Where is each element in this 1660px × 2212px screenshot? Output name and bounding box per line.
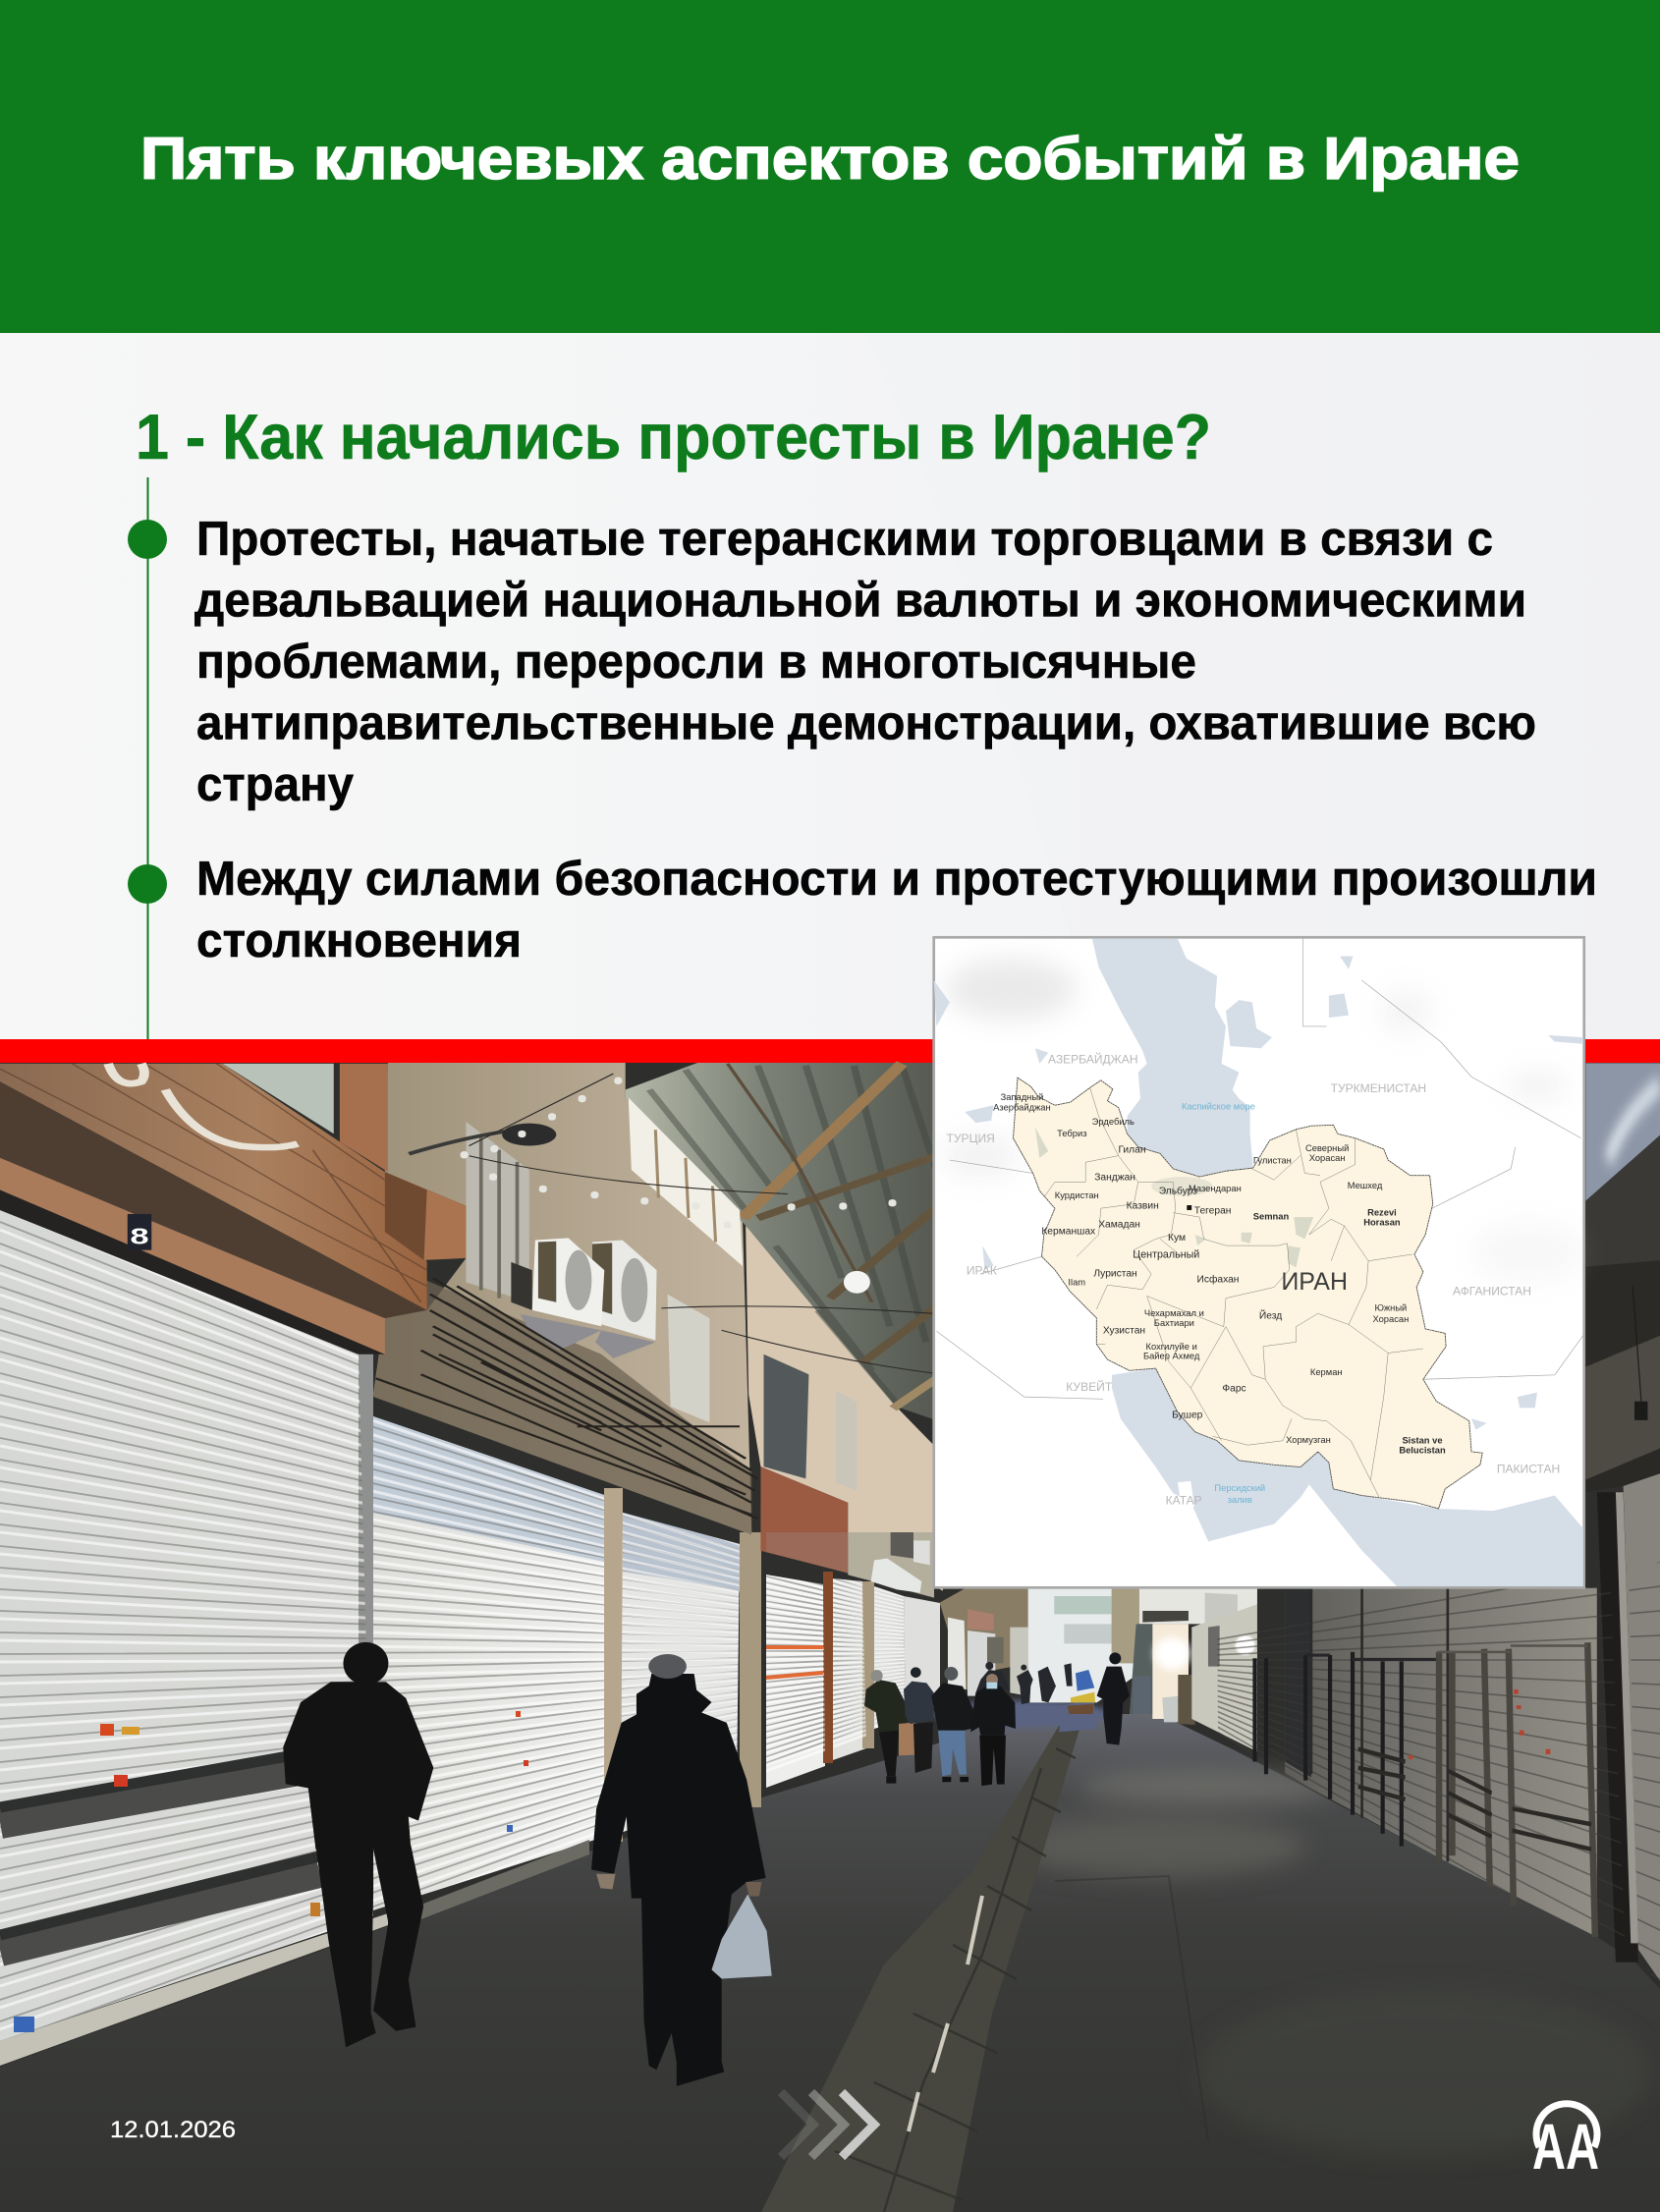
labels: provinces: Западный — [1001, 1092, 1043, 1102]
labels: countries: ТУРКМЕНИСТАН — [1331, 1081, 1426, 1095]
labels: provinces: Хамадан — [1098, 1219, 1140, 1230]
labels: provinces: Хузистан — [1103, 1325, 1145, 1336]
right shop frames — [1255, 1588, 1595, 1937]
labels: provinces: Тебриз — [1057, 1129, 1087, 1138]
roof beams — [743, 1064, 902, 1218]
labels: provinces: Ilam — [1068, 1277, 1085, 1287]
number plate — [128, 1214, 151, 1250]
cable bundle — [376, 1278, 757, 1519]
bullet one — [128, 520, 167, 559]
labels: provinces: Чехармахал и — [1144, 1308, 1204, 1318]
labels: provinces: Бушер — [1172, 1410, 1203, 1421]
air conditioners — [521, 1238, 657, 1358]
labels: provinces: Исфахан — [1196, 1274, 1239, 1286]
person 4 — [970, 1674, 1016, 1786]
labels: provinces: Horasan — [1363, 1218, 1401, 1228]
labels: provinces: Тегеран — [1194, 1206, 1231, 1217]
person 2 — [904, 1667, 934, 1773]
wood box — [385, 1172, 466, 1260]
text block: first point: страну — [196, 758, 354, 811]
title: Пять ключевых аспектов событий в Иране — [140, 126, 1520, 192]
person 3 — [931, 1667, 974, 1780]
labels: provinces: Мешхед — [1348, 1181, 1383, 1190]
labels: provinces: Курдистан — [1055, 1190, 1099, 1200]
brown box — [760, 1466, 848, 1573]
labels: provinces: Кохгилуйе и — [1146, 1342, 1197, 1352]
ornament — [108, 1064, 298, 1147]
labels: provinces: Казвин — [1127, 1201, 1159, 1212]
distant shoppers — [975, 1662, 1073, 1704]
labels: countries: ПАКИСТАН — [1497, 1462, 1560, 1475]
upper left facade and roof — [0, 1063, 943, 1591]
labels: countries — [947, 1051, 1560, 1507]
date: 12.01.2026 — [110, 2117, 236, 2143]
header band — [0, 0, 1660, 333]
labels: countries: АЗЕРБАЙДЖАН — [1048, 1051, 1138, 1066]
blackboard — [763, 1355, 808, 1478]
far end of the alley — [766, 1532, 1257, 1751]
dark soffit — [0, 1081, 427, 1318]
labels: countries: КАТАР — [1166, 1493, 1202, 1507]
labels: countries: КУВЕЙТ — [1066, 1379, 1113, 1394]
foreground figure right — [591, 1654, 772, 2086]
right strip above map level — [1585, 1063, 1660, 1492]
text block: first point: проблемами, переросли в многотысячные — [196, 636, 1196, 689]
left shutters — [0, 1210, 940, 2066]
shutter rails — [0, 1768, 319, 1950]
right shutter slats — [1217, 1562, 1660, 1980]
icon: agency logo: AA — [1532, 2110, 1599, 2183]
text block: first point: антиправительственные демонстрации, охватившие всю — [196, 697, 1536, 750]
labels: provinces: Гулистан — [1253, 1156, 1292, 1166]
text block: second point — [196, 853, 1597, 968]
cart vendor — [1068, 1670, 1095, 1714]
lakes — [934, 956, 1583, 1430]
text block: first point: Протесты, начатые тегеранскими торговцами в связи с — [196, 513, 1493, 566]
province borders — [1044, 1087, 1423, 1498]
labels: provinces: Sistan ve — [1402, 1435, 1443, 1445]
skylight windows — [629, 1098, 743, 1266]
labels: provinces: Байер Ахмед — [1143, 1352, 1200, 1361]
labels: provinces: Belucistan — [1399, 1445, 1446, 1455]
bright wall — [1152, 1624, 1189, 1719]
labels: seas: залив — [1228, 1495, 1252, 1505]
number plate: 8 — [130, 1225, 149, 1249]
orange stripes — [766, 1647, 823, 1678]
labels: provinces: Мазендаран — [1189, 1184, 1242, 1193]
wood fascia — [0, 1064, 427, 1310]
person 1 — [864, 1670, 915, 1784]
text block: second point: столкновения — [196, 914, 522, 968]
labels: provinces: Южный — [1374, 1303, 1407, 1313]
labels: provinces: Фарс — [1222, 1383, 1246, 1394]
window above fascia — [223, 1064, 334, 1134]
red divider — [0, 1039, 1660, 1063]
labels: provinces: Хорасан — [1372, 1314, 1409, 1324]
map — [934, 937, 1585, 1587]
labels: countries: ТУРЦИЯ — [947, 1132, 995, 1145]
shutter housing shadow — [0, 1189, 385, 1355]
text block: first point: девальвацией национальной валюты и экономическими — [194, 574, 1526, 627]
windows — [466, 1122, 529, 1302]
capital marker — [1187, 1205, 1191, 1210]
shutter slats — [0, 1216, 906, 2031]
caspian sea — [1092, 939, 1253, 1177]
labels: provinces: Гилан — [1118, 1144, 1146, 1155]
labels: provinces: Центральный — [1133, 1249, 1199, 1261]
section heading: 1 - Как начались протесты в Иране? — [136, 401, 1211, 472]
labels: seas: Каспийское море — [1182, 1102, 1255, 1112]
labels: provinces: Азербайджан — [993, 1103, 1051, 1113]
icon: chevrons — [781, 2092, 874, 2157]
salt flats — [1035, 1128, 1313, 1267]
labels: countries: АФГАНИСТАН — [1453, 1285, 1531, 1299]
persian gulf — [1112, 1368, 1583, 1586]
group of walking people — [864, 1652, 1130, 1786]
panel: text background — [0, 333, 1660, 1039]
text block: second point: Между силами безопасности и протестующими произошли — [196, 853, 1597, 906]
stickers — [14, 1711, 528, 2032]
labels: provinces: Эльбурз — [1159, 1185, 1197, 1196]
street lamp — [409, 1124, 556, 1154]
brick pilaster — [340, 1064, 388, 1172]
labels: provinces: Северный — [1305, 1143, 1349, 1153]
labels: seas — [1182, 1102, 1265, 1505]
photo: closed bazaar — [0, 1063, 1660, 2212]
labels: provinces — [993, 1092, 1446, 1455]
shaded lower wall — [373, 1278, 751, 1534]
labels: provinces: Эрдебиль — [1092, 1117, 1134, 1127]
labels: provinces: Луристан — [1093, 1268, 1137, 1279]
timeline — [128, 477, 167, 1039]
second wood band — [0, 1158, 385, 1355]
right side shutters — [1285, 1473, 1660, 1981]
foreground figure left — [283, 1642, 433, 2047]
labels: provinces: Хормузган — [1286, 1435, 1331, 1445]
man in black far right — [1097, 1652, 1130, 1745]
labels: provinces: Занджан — [1094, 1173, 1135, 1184]
labels: provinces: Бахтиари — [1154, 1318, 1194, 1328]
bullet two — [128, 864, 167, 904]
terrain shading — [941, 959, 1585, 1283]
labels: provinces: Керманшах — [1041, 1226, 1096, 1237]
brick wall — [746, 1226, 943, 1591]
foreground people — [283, 1642, 772, 2086]
floor — [0, 1700, 1660, 2212]
corrugated roof — [626, 1063, 943, 1422]
labels: seas: Персидский — [1214, 1483, 1265, 1493]
iran territory — [1014, 1078, 1482, 1509]
labels: provinces: Rezevi — [1367, 1208, 1397, 1218]
beige wall — [373, 1063, 751, 1534]
labels: countries: ИРАК — [967, 1264, 997, 1278]
labels: provinces: Керман — [1310, 1367, 1343, 1377]
labels: provinces: Йезд — [1259, 1309, 1282, 1322]
string lights — [465, 1074, 943, 1374]
labels: provinces: Semnan — [1253, 1211, 1289, 1221]
label: iran: ИРАН — [1281, 1268, 1348, 1296]
text block: first point — [194, 513, 1536, 811]
neighbouring borders — [936, 939, 1583, 1509]
plastic bag — [711, 1894, 772, 1979]
labels: provinces: Хорасан — [1309, 1153, 1346, 1163]
labels: provinces: Кум — [1168, 1233, 1186, 1244]
icon: agency logo — [1532, 2104, 1599, 2183]
